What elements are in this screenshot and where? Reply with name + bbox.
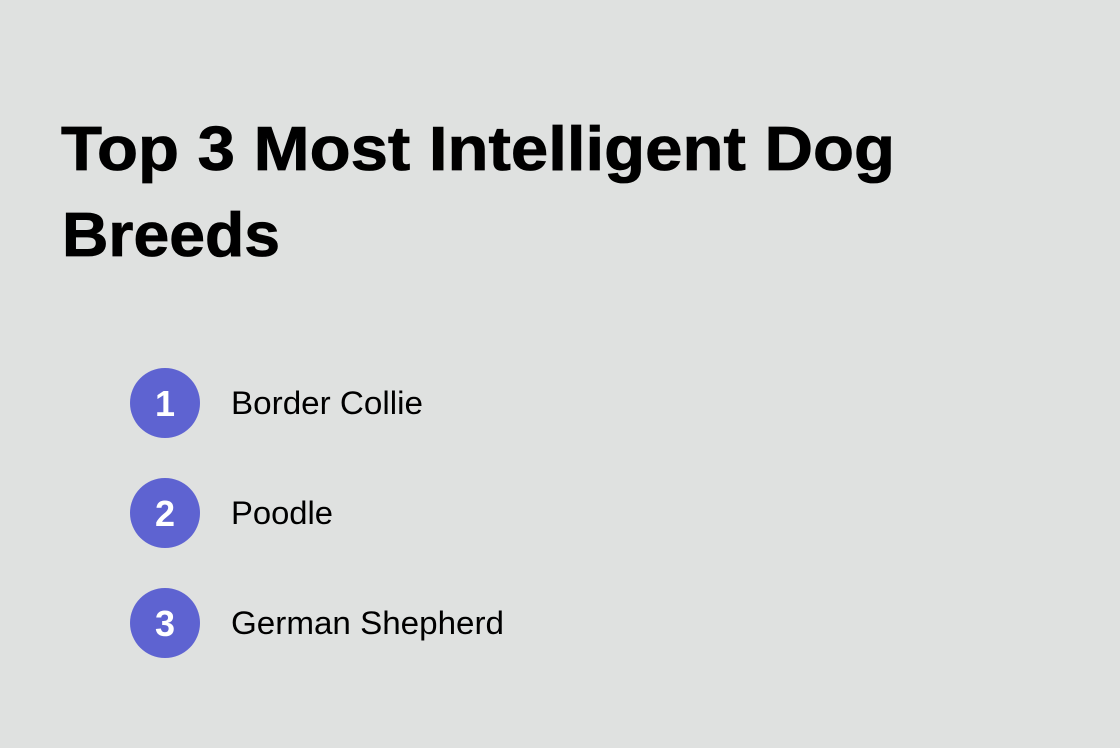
list item 2: Poodle: 2 (155, 493, 175, 534)
list item 3: German Shepherd (130, 588, 504, 658)
list item 2: Poodle (130, 478, 333, 548)
title (61, 115, 895, 270)
list item 3: German Shepherd: 3 (155, 603, 175, 644)
list item 1: Border Collie: Border Collie (231, 385, 423, 421)
list item 1: Border Collie (130, 368, 423, 438)
list item 2: Poodle: Poodle (231, 495, 333, 531)
title: Top 3 Most Intelligent Dog (61, 115, 895, 184)
list item 3: German Shepherd: German Shepherd (231, 605, 504, 641)
title: Breeds (62, 201, 280, 270)
list item 1: Border Collie: 1 (155, 383, 175, 424)
list of breeds (130, 368, 504, 658)
